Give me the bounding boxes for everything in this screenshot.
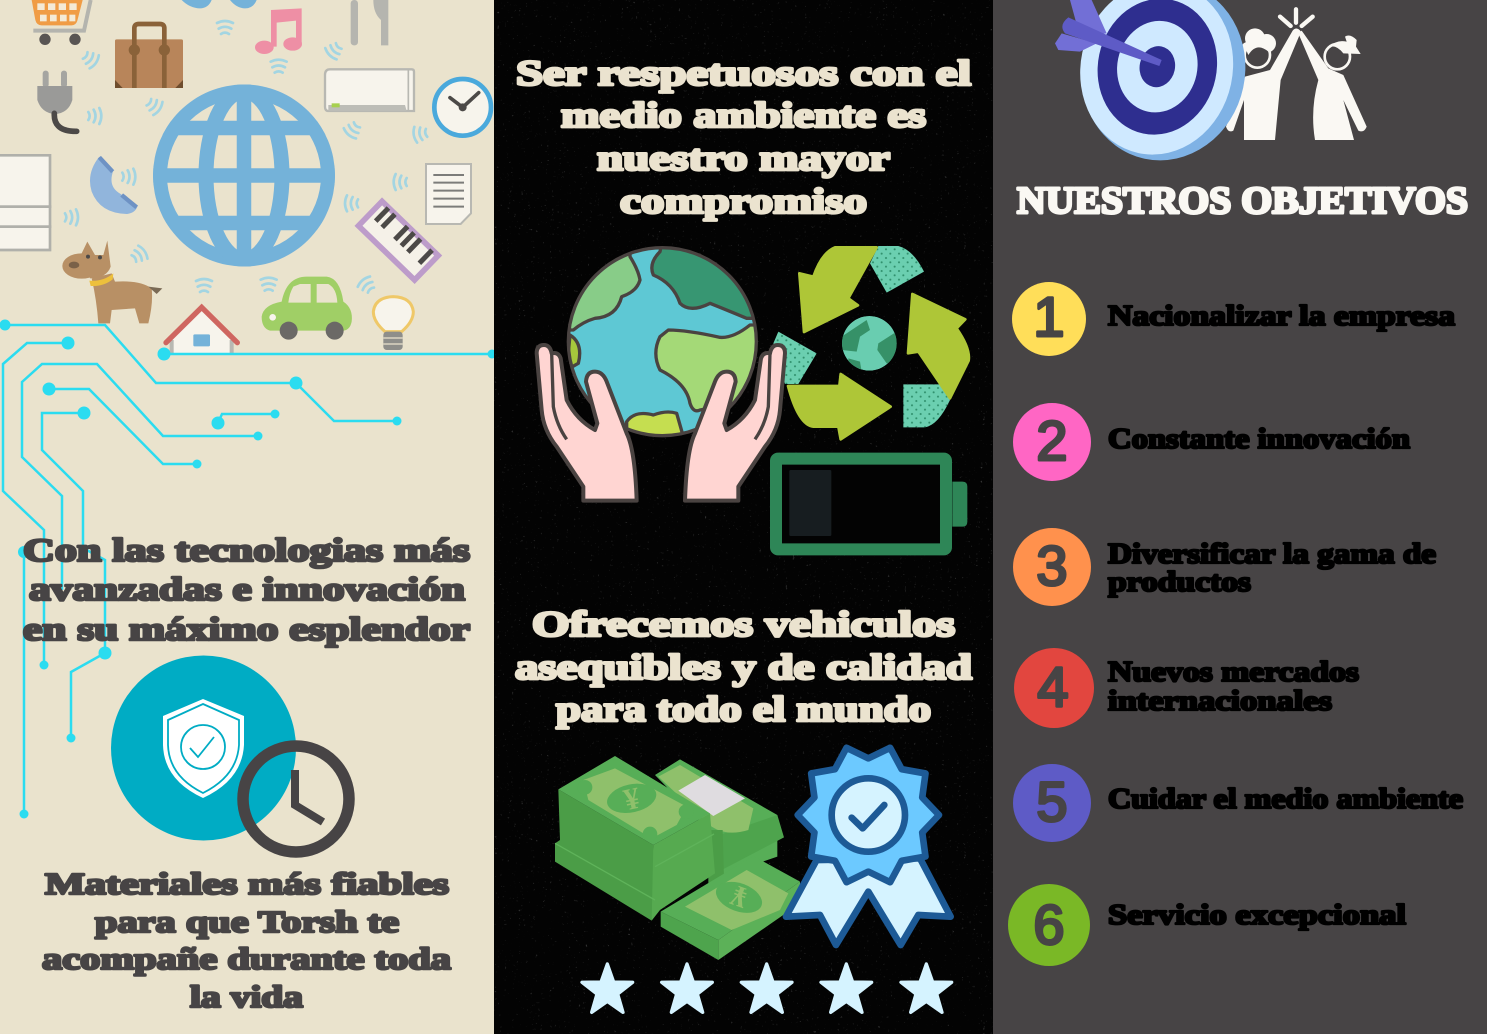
icon: target	[1064, 0, 1262, 176]
heading: compromiso: nuestro mayor	[597, 138, 890, 178]
panel: objetivos (right)	[993, 0, 1487, 1034]
list item 3: productos	[1108, 567, 1251, 598]
icon: money, badge and stars	[555, 748, 952, 1012]
list item 6: 6	[1033, 893, 1065, 956]
icon: dog	[62, 241, 162, 323]
panel: medio ambiente (middle)	[494, 0, 993, 1034]
icon: recycle arrows	[773, 246, 969, 439]
list item 2: Constante innovación	[1108, 424, 1410, 455]
list item 3: Diversificar la gama de	[1108, 539, 1436, 570]
icon: banknote stacks	[555, 756, 800, 960]
list item 6	[1008, 884, 1406, 966]
list item 1: Nacionalizar la empresa	[1108, 301, 1455, 332]
text: materiales: acompañe durante toda	[42, 941, 452, 976]
list item 4	[1014, 648, 1359, 728]
list item 5	[1013, 764, 1463, 842]
icon: refrigerator	[0, 155, 50, 250]
icon: arrow	[1055, 0, 1162, 66]
icon: shopping cart	[32, 0, 91, 45]
icon: high-five people	[1226, 9, 1367, 140]
panel: tecnología (left)	[0, 0, 497, 1034]
icon: small earth	[842, 316, 898, 372]
icon: globe	[150, 84, 338, 268]
heading: tecnologías	[23, 533, 470, 648]
icon: left hand	[537, 345, 637, 501]
icon: headphones top	[182, 0, 257, 8]
icon: telephone	[90, 157, 137, 214]
icon: quality badge	[786, 748, 951, 945]
heading: tecnologías: Con las tecnologias más	[23, 533, 470, 569]
icon: right hand	[685, 345, 785, 501]
icon: hands holding earth, recycling, battery	[537, 237, 969, 549]
list item 2	[1013, 403, 1410, 481]
icon: keyboard	[358, 201, 438, 280]
heading: compromiso: compromiso	[620, 181, 867, 221]
icon: plug	[37, 71, 77, 131]
icon: connected objects illustration	[0, 0, 491, 354]
icon: clock	[434, 79, 491, 136]
list item 4: internacionales	[1108, 686, 1332, 717]
list item 5: Cuidar el medio ambiente	[1108, 784, 1463, 815]
icon: earth	[566, 246, 758, 438]
icon: battery	[776, 459, 967, 549]
circuit lines	[0, 320, 496, 818]
heading: compromiso: medio ambiente es	[561, 95, 926, 135]
list item 5: 5	[1036, 770, 1068, 833]
heading: vehículos: asequibles y de calidad	[515, 647, 972, 687]
icon: target, arrow and high-five	[1055, 0, 1367, 176]
icon: light bulb	[373, 297, 413, 350]
list item 2: 2	[1036, 409, 1068, 472]
icon: car	[262, 277, 352, 340]
heading: compromiso: Ser respetuosos con el	[516, 53, 971, 93]
icon: clock outline	[243, 746, 349, 852]
heading: nuestros objetivos: NUESTROS OBJETIVOS	[1017, 180, 1468, 222]
text: materiales: para que Torsh te	[95, 904, 399, 939]
heading: vehículos: Ofrecemos vehiculos	[532, 604, 955, 644]
heading: tecnologías: avanzadas e innovación	[29, 572, 465, 608]
icon: house	[166, 307, 237, 354]
icon: music note	[255, 8, 302, 54]
icon: shield in teal circle	[111, 656, 296, 840]
list item 4: Nuevos mercados	[1108, 657, 1359, 688]
list item 3: 3	[1036, 534, 1068, 597]
heading: vehículos	[515, 604, 972, 729]
icon: five stars	[582, 964, 952, 1012]
list item 6: Servicio excepcional	[1108, 900, 1406, 931]
heading: vehículos: para todo el mundo	[556, 689, 931, 729]
text: materiales: Materiales más fiables	[45, 866, 449, 901]
icon: air conditioner	[325, 69, 414, 111]
heading: compromiso	[516, 53, 971, 221]
list item 1: 1	[1033, 285, 1065, 348]
icon: banknote stacks: ¥	[621, 781, 643, 817]
heading: tecnologías: en su máximo esplendor	[23, 612, 470, 648]
list item 3	[1013, 528, 1436, 606]
text: materiales: la vida	[190, 979, 304, 1014]
icon: banknote stacks: ¥	[727, 878, 752, 914]
icon: document	[426, 164, 471, 224]
list item 4: 4	[1037, 655, 1069, 718]
icon: suitcase	[115, 24, 183, 88]
icon: cutlery	[351, 0, 388, 45]
list item 1	[1012, 282, 1455, 356]
text: materiales	[42, 866, 452, 1014]
